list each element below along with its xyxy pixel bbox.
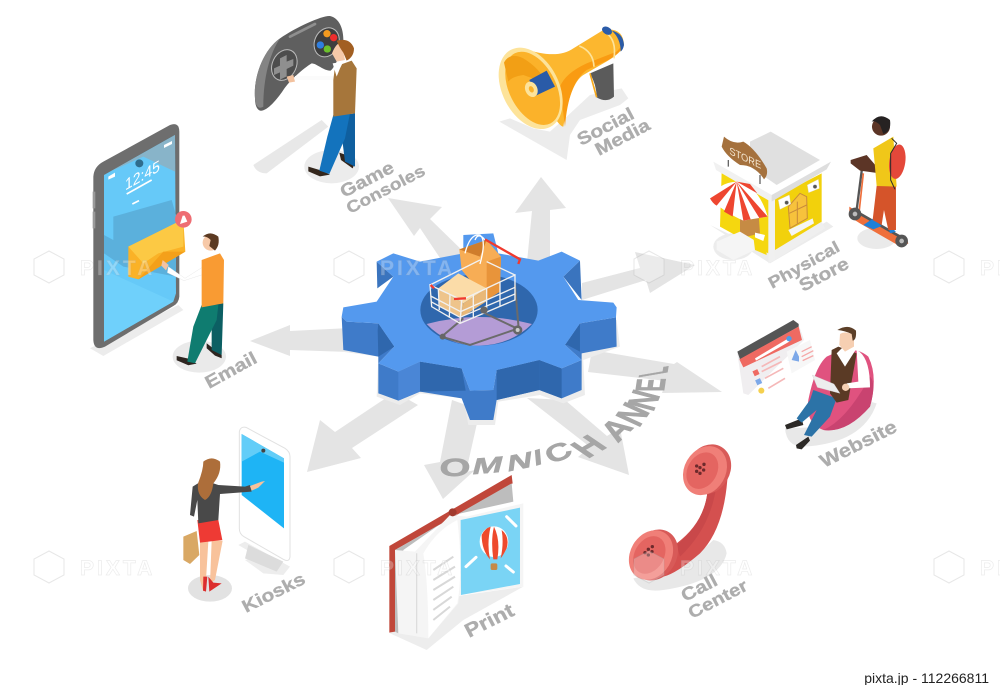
- shopping bag: [459, 235, 501, 300]
- shadows: [253, 120, 328, 173]
- megaphone bell: [486, 37, 576, 140]
- omnichannel curved title: O: [438, 454, 472, 482]
- call center label: Call: [678, 571, 721, 606]
- woman with bag: [183, 458, 265, 602]
- cardboard box: [438, 273, 487, 317]
- gear with shopping cart: [342, 233, 620, 425]
- man on scooter: [849, 116, 908, 249]
- channel: call center: [620, 436, 740, 591]
- store sign: [722, 137, 767, 184]
- omnichannel infographic: Consoles: [343, 161, 428, 217]
- pixta watermarks: PIXTA: [380, 257, 455, 280]
- omnichannel infographic: Media: [592, 115, 654, 160]
- omnichannel infographic: Store: [796, 254, 853, 296]
- phone screen: [104, 135, 176, 342]
- physical store label: Physical: [765, 238, 843, 292]
- omnichannel curved title: E: [627, 378, 675, 392]
- store window: [788, 193, 814, 236]
- store roof: [713, 132, 831, 202]
- channel: website: [737, 320, 877, 449]
- channel: game consoles: [253, 16, 359, 183]
- megaphone shadow: [499, 88, 628, 160]
- kiosks label: Kiosks: [239, 570, 309, 617]
- channel: email: [90, 124, 226, 373]
- pixta watermarks: PIXTA: [80, 557, 155, 580]
- channel: kiosks: [183, 427, 290, 602]
- book shadow: [390, 587, 523, 650]
- man with controller: [287, 40, 357, 176]
- pixta watermarks: PIXTA: [380, 557, 455, 580]
- man with email: [161, 233, 226, 373]
- book pages: [395, 483, 523, 638]
- game consoles label: Game: [337, 157, 398, 202]
- bean bag: [808, 350, 874, 430]
- man on bean bag: [785, 327, 870, 449]
- website label: Website: [817, 417, 901, 472]
- megaphone handle: [590, 63, 614, 100]
- social media label: Social: [574, 104, 638, 150]
- gear side faces: [342, 261, 617, 420]
- omnichannel curved title: N: [506, 446, 534, 477]
- megaphone driver: [529, 71, 555, 96]
- gear hole: [420, 274, 538, 346]
- game controller: [255, 16, 344, 111]
- omnichannel curved title: H: [563, 430, 615, 463]
- channel: social media: [486, 25, 628, 160]
- email label: Email: [202, 348, 260, 393]
- store walls: [720, 172, 825, 263]
- gear top face: [342, 233, 617, 391]
- megaphone body: [523, 29, 624, 127]
- balloon picture: [461, 508, 520, 595]
- phone body: [93, 124, 179, 348]
- omnichannel curved title: N: [620, 386, 669, 415]
- pixta watermarks: [34, 251, 1000, 583]
- purple floor: [427, 317, 532, 346]
- omnichannel curved title: C: [539, 436, 578, 469]
- omnichannel curved title: N: [609, 398, 659, 432]
- omnichannel curved title: [438, 364, 678, 482]
- handset: [663, 450, 729, 577]
- phone clock: 12:45: [125, 157, 160, 195]
- handset shadow: [633, 540, 727, 591]
- cart red handles: [431, 239, 520, 299]
- envelope: [128, 211, 192, 279]
- cart basket: [430, 260, 515, 323]
- cart frame: [442, 285, 519, 345]
- pixta watermarks: PIXTA: [80, 257, 155, 280]
- kiosk base: [238, 542, 290, 575]
- web page window: [737, 320, 815, 395]
- pixta watermarks: PIXTA: [680, 557, 755, 580]
- arrows radiating from gear: [250, 177, 722, 499]
- gear shadow: [342, 320, 620, 425]
- air conditioners: [778, 179, 819, 209]
- channel: physical store: [710, 116, 908, 263]
- chair shadow: [785, 402, 877, 447]
- omnichannel curved title: M: [469, 452, 506, 480]
- omnichannel infographic: Center: [685, 575, 751, 622]
- pixta watermarks: PIXTA: [680, 257, 755, 280]
- omnichannel curved title: A: [593, 412, 640, 447]
- striped awning: [710, 182, 768, 221]
- store door and steps: [717, 210, 767, 260]
- phone shadow: [90, 305, 183, 356]
- phone side buttons: [93, 192, 95, 228]
- kiosk screen: [239, 427, 290, 561]
- omnichannel curved title: I: [533, 443, 543, 471]
- omnichannel curved title: L: [631, 364, 678, 379]
- store shadow: [710, 222, 833, 263]
- store sign: STORE: [729, 146, 761, 172]
- book cover: [389, 475, 513, 633]
- cart wheels: [440, 306, 522, 340]
- print label: Print: [461, 599, 518, 642]
- channel: print: [389, 475, 523, 650]
